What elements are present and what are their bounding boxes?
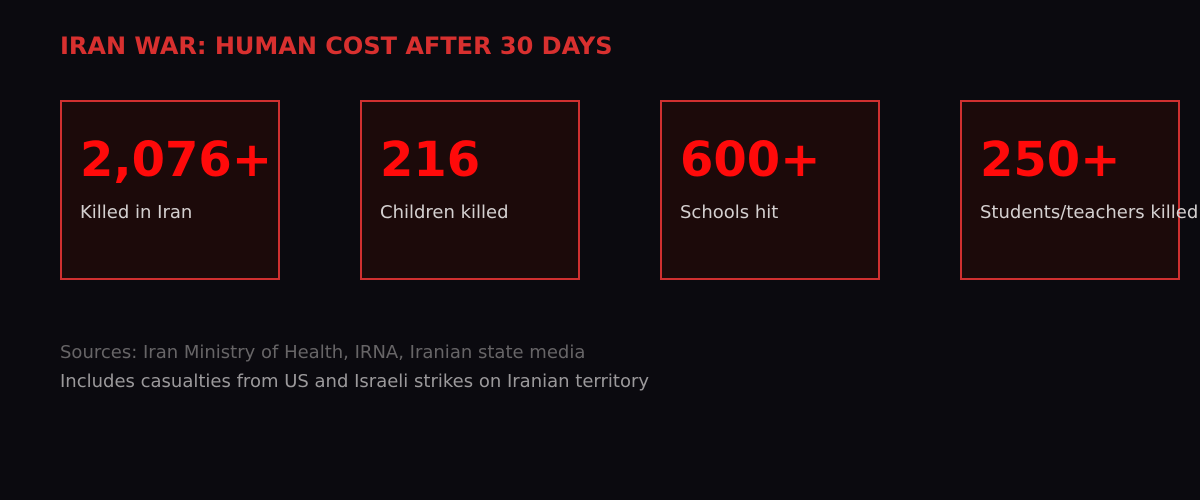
panel: killed in Iran: [60, 100, 280, 280]
stat number: 216: [380, 132, 480, 188]
stat label: Children killed: [380, 202, 509, 223]
stat label: Students/teachers killed: [980, 202, 1198, 223]
stat number: 250+: [980, 132, 1120, 188]
panel: schools hit: [660, 100, 880, 280]
panel: children killed: [360, 100, 580, 280]
panel: students/teachers killed: [960, 100, 1180, 280]
stat label: Killed in Iran: [80, 202, 192, 223]
sources text: Sources: Iran Ministry of Health, IRNA, Iranian state media: [60, 342, 585, 363]
footnote: Includes casualties from US and Israeli strikes on Iranian territory: [60, 371, 649, 392]
stat number: 600+: [680, 132, 820, 188]
stat label: Schools hit: [680, 202, 778, 223]
stat number: 2,076+: [80, 132, 272, 188]
title: IRAN WAR: HUMAN COST AFTER 30 DAYS: [60, 32, 613, 60]
